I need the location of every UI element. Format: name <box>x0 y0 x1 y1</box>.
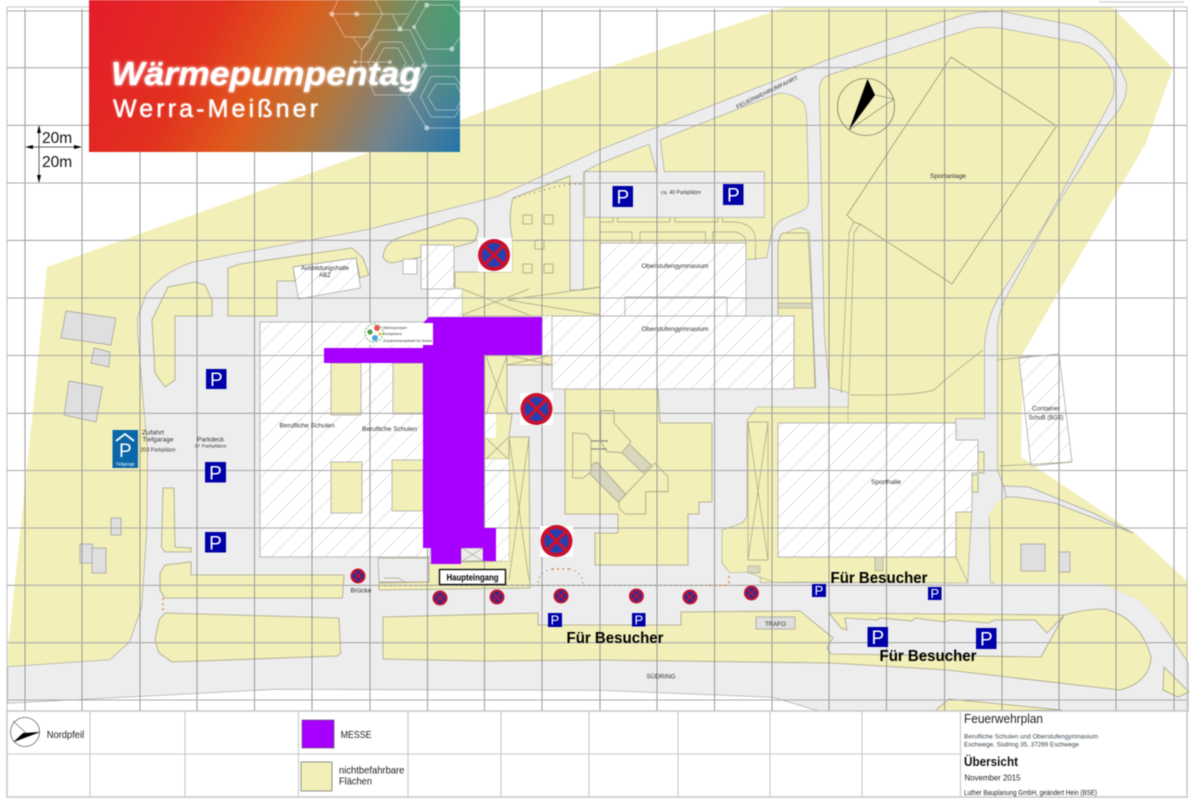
island: around training hall <box>228 248 369 316</box>
icon: small sign 7 <box>744 586 759 600</box>
island: small right triangle <box>1163 667 1189 697</box>
icon: visitor parking big 1: P <box>871 628 884 649</box>
small square <box>403 259 417 274</box>
label: building and road names: Oberstufengymnasium <box>642 327 708 333</box>
icon: small sign 2 <box>432 590 448 606</box>
east wing <box>484 414 496 438</box>
label: building and road names: Zufahrt <box>142 430 164 436</box>
icon: parking north 1: P <box>616 188 629 208</box>
title block: Eschwege, Südring 35, 37269 Eschwege <box>964 741 1079 748</box>
icon: visitor parking small 2 <box>632 612 646 628</box>
no-stopping signs large <box>478 238 573 557</box>
building: Oberstufengymnasium north <box>600 243 746 316</box>
paths and plan lines <box>378 217 1072 582</box>
title block: Berufliche Schulen und Oberstufengymnasium <box>964 734 1098 741</box>
island: small piece east 2 <box>972 475 978 492</box>
scale marker 20m <box>25 125 82 183</box>
label: building and road names: Ausbildungshalle <box>301 266 350 272</box>
island: crossed link <box>507 355 552 365</box>
compass north arrow <box>838 78 894 136</box>
label: building and road names: Tiefgarage <box>142 438 174 444</box>
title block: November 2015 <box>964 773 1021 783</box>
icon: parking north 1 <box>612 186 633 208</box>
island: L-shaped <box>162 488 191 552</box>
courtyard NE <box>393 363 423 414</box>
logo: Wärmepumpen Kompetenz Zentrum: Wärmepumpen <box>383 326 407 330</box>
label: visitors 2: Für Besucher <box>566 630 664 647</box>
icon: visitor parking small 1: P <box>551 612 559 628</box>
icon: parking deck 3 <box>205 532 226 554</box>
island: crossed block east of hall <box>484 355 512 459</box>
icon: parking deck 3: P <box>209 534 222 554</box>
legend: non-drivable swatch: Flächen <box>339 776 372 788</box>
icon: no stopping south <box>540 525 573 557</box>
logo: Wärmepumpen Kompetenz Zentrum: Kompetenz <box>383 332 402 336</box>
steps Sporthalle <box>875 557 883 571</box>
island: long south with oval <box>383 609 1151 690</box>
label: building and road names: Container <box>1032 406 1060 412</box>
icon: visitor parking small 1 <box>548 612 562 628</box>
label: building and road names: Berufliche Schulen <box>280 424 334 430</box>
legend: exhibition swatch: MESSE <box>341 729 372 741</box>
building: container shed <box>1019 354 1072 466</box>
courtyard element 2 <box>601 411 631 453</box>
icon: visitor parking small 3: P <box>815 583 823 598</box>
courtyard SE <box>392 460 423 511</box>
no-stopping signs small <box>350 568 759 606</box>
road wedge south-east <box>1004 486 1133 533</box>
label: building and road names: Sportanlage <box>930 174 967 180</box>
callout: main entrance <box>440 570 506 584</box>
title block: Luther Bauplanung GmbH, geändert Hein (BSE) <box>964 790 1097 797</box>
banner hexagon network <box>332 0 460 128</box>
building east small <box>1059 552 1070 572</box>
icon: small sign 5 <box>629 588 644 604</box>
icon: visitor parking big 1 <box>868 627 888 649</box>
icon: small sign 1 <box>350 568 366 584</box>
icon: visitor parking small 3 <box>812 583 826 598</box>
icon: visitor parking small 2: P <box>634 612 643 628</box>
courtyard SW <box>331 462 362 513</box>
north link <box>429 289 462 316</box>
icon: parking north 2: P <box>727 186 740 206</box>
island: north-east campus <box>778 233 815 388</box>
icon: small sign 6 <box>682 590 698 604</box>
building east <box>1021 544 1045 571</box>
label: building and road names: ABZ <box>319 273 331 279</box>
stairs west <box>585 462 628 505</box>
label: building and road names: Brücke <box>350 588 372 594</box>
icon: no stopping centre <box>520 393 553 425</box>
courtyard shapes <box>573 411 668 514</box>
building: Ausbildungshalle ABZ <box>293 258 360 299</box>
icon: underground garage sign: P <box>119 441 132 462</box>
label: building and road names: TRAFO <box>765 622 786 628</box>
steps west <box>748 566 760 573</box>
label: building and road names: ca. 40 Parkplätze <box>661 190 701 196</box>
scale marker 20m: 20m <box>42 154 72 171</box>
label: building and road names: 203 Parkplätze <box>140 448 176 454</box>
icon: no stopping north <box>478 238 512 272</box>
icon: parking deck 1: P <box>210 370 223 391</box>
island: parking strip <box>829 613 1064 633</box>
north block <box>421 245 454 289</box>
label: building and road names: 37 Parkplätze <box>194 444 227 448</box>
yard squares <box>523 215 553 273</box>
label: visitors 1: Für Besucher <box>830 570 928 587</box>
link east <box>541 316 552 355</box>
label: building and road names <box>140 75 1064 681</box>
icon: parking deck 2: P <box>209 464 222 484</box>
stair link <box>591 441 608 449</box>
building fourth <box>111 518 121 535</box>
icon: parking deck 2 <box>205 462 226 484</box>
island: Sporthalle surround west <box>722 407 968 583</box>
label: building and road names: FEUERWEHRUMFAHRT <box>736 75 800 110</box>
neighbouring grey buildings <box>61 311 1070 629</box>
title block: Feuerwehrplan <box>964 711 1043 726</box>
island: south-east <box>989 497 1188 650</box>
label: building and road names: SchuB (BGS) <box>1028 416 1064 422</box>
logo: Wärmepumpen Kompetenz Zentrum: Zusammenarbeit im Kreis <box>383 339 432 343</box>
building third <box>64 381 102 422</box>
callout: main entrance: Haupteingang <box>446 572 498 582</box>
yellow islands <box>152 176 1189 711</box>
dotted fire route <box>163 184 729 611</box>
island: bottom strip <box>935 699 1062 711</box>
banner subtitle: Werra-Meißner <box>113 95 318 123</box>
sports ground outline <box>847 57 1056 284</box>
building: Sporthalle <box>778 423 978 557</box>
icon: visitor parking small 4: P <box>930 586 939 601</box>
icon: visitor parking small 4 <box>928 586 942 601</box>
building: Berufliche Schulen <box>260 245 552 561</box>
label: building and road names: SÜDRING <box>646 674 676 680</box>
legend panel <box>7 711 1187 797</box>
island: small pieces east <box>978 452 984 473</box>
trafo <box>756 617 795 629</box>
building small <box>91 348 110 367</box>
small stair marks <box>748 303 883 573</box>
label: visitors 3: Für Besucher <box>880 648 976 665</box>
stairs east <box>621 443 651 473</box>
label: building and road names: Berufliche Schulen <box>362 427 417 433</box>
banner title: Wärmepumpentag <box>111 56 421 93</box>
icon: underground garage sign: Tiefgarage <box>116 462 135 466</box>
courtyard element 1 <box>573 433 591 478</box>
building sixth <box>92 548 106 573</box>
legend: exhibition swatch <box>302 720 372 748</box>
icon: underground garage sign <box>112 430 138 468</box>
island: south west strip 2 <box>155 613 341 662</box>
label: building and road names: Oberstufengymnasium <box>642 264 708 270</box>
banner network nodes <box>329 2 455 131</box>
courtyard NW <box>331 363 361 415</box>
courtyard element 3 <box>619 463 668 514</box>
banner: Wärmepumpentag Werra-Meißner <box>89 0 460 152</box>
icon: parking north 2 <box>723 184 744 206</box>
scale marker 20m: 20m <box>42 130 72 147</box>
building: Oberstufengymnasium south <box>552 316 794 389</box>
building fifth <box>80 544 93 563</box>
parking signs <box>205 184 996 650</box>
title block <box>964 711 1098 797</box>
icon: parking deck 1 <box>206 369 226 391</box>
icon: visitor parking big 2: P <box>980 630 993 650</box>
legend: non-drivable swatch <box>301 762 405 791</box>
legend: non-drivable swatch: nichtbefahrbare <box>339 764 405 776</box>
legend: north arrow <box>10 718 84 746</box>
label: building and road names: Parkdeck <box>197 438 225 444</box>
icon: small sign 3 <box>490 590 504 604</box>
island: north access <box>383 218 478 263</box>
island: entrance strip <box>379 437 530 590</box>
title block: Übersicht <box>964 754 1019 769</box>
logo: Wärmepumpen Kompetenz Zentrum <box>365 323 433 345</box>
icon: visitor parking big 2 <box>976 628 996 650</box>
legend: north arrow: Nordpfeil <box>47 730 84 741</box>
island: south west strip 1 <box>160 562 344 598</box>
east wing south <box>484 459 509 561</box>
exhibition area MESSE in purple <box>324 317 542 564</box>
island: centre north <box>455 176 600 316</box>
icon: small sign 4 <box>554 588 568 604</box>
label: building and road names: Sporthalle <box>871 480 902 486</box>
island: central courtyard <box>565 389 712 565</box>
island: west of parking deck <box>152 282 212 387</box>
